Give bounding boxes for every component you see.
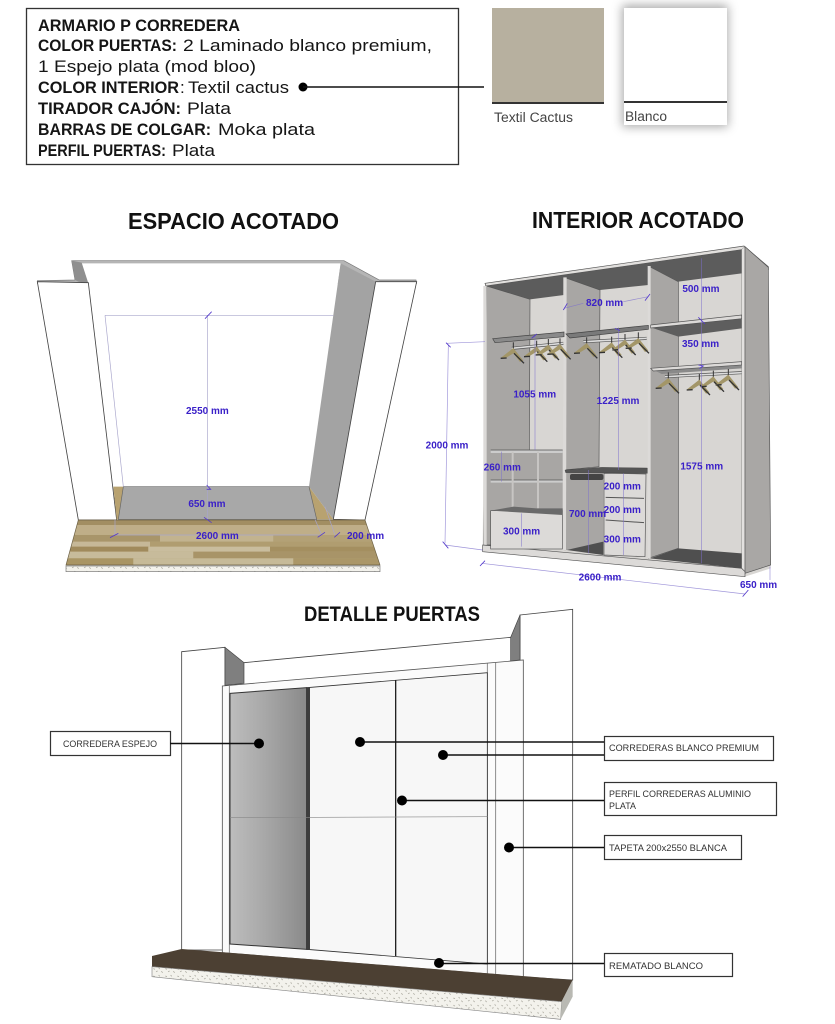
specification box xyxy=(26,8,458,164)
hanging rails: Moka plata xyxy=(218,120,316,139)
swatch: blanco xyxy=(622,5,728,127)
dimension: 650: 650 mm xyxy=(188,499,226,510)
door profile: PERFIL PUERTAS: xyxy=(38,141,166,160)
dimension: 2600: 2600 mm xyxy=(579,572,622,583)
interior colour xyxy=(38,78,289,97)
drawer handle: TIRADOR CAJÓN: xyxy=(38,99,181,118)
callout: rematado blanco: REMATADO BLANCO xyxy=(609,961,703,972)
diagram: espacio acotado xyxy=(37,261,417,572)
dimension: 2000: 2000 mm xyxy=(426,440,469,451)
dimension: 820: 820 mm xyxy=(586,298,623,309)
swatch: textil cactus: Textil Cactus xyxy=(494,110,573,125)
dimension: 1055: 1055 mm xyxy=(513,389,556,400)
callout: perfil correderas: PERFIL CORREDERAS ALUMINIO xyxy=(609,789,751,800)
shelves xyxy=(491,315,742,557)
left wall xyxy=(182,647,225,950)
dimension: 1225: 1225 mm xyxy=(597,396,640,407)
diagram: interior acotado xyxy=(426,246,777,597)
dimension: 300 left: 300 mm xyxy=(503,526,540,537)
door colour: COLOR PUERTAS: xyxy=(38,36,177,55)
diagram: detalle puertas xyxy=(152,609,573,1019)
dimension: 200 lower drawer: 200 mm xyxy=(604,505,641,516)
dimension: 500: 500 mm xyxy=(682,284,720,295)
callout: perfil correderas xyxy=(397,782,776,816)
callout: tapeta: TAPETA 200x2550 BLANCA xyxy=(609,843,728,854)
heading: detalle puertas: DETALLE PUERTAS xyxy=(304,603,480,626)
pointer to interior swatch xyxy=(298,82,484,92)
dimension lines xyxy=(445,258,770,594)
dimension: 650: 650 mm xyxy=(740,580,777,591)
product title: ARMARIO P CORREDERA xyxy=(38,16,240,35)
dimension: 1575: 1575 mm xyxy=(680,461,723,472)
callout: corredera espejo: CORREDERA ESPEJO xyxy=(63,739,157,750)
dimension: 200: 200 mm xyxy=(347,531,384,542)
dimension: 260: 260 mm xyxy=(484,462,521,473)
dimension: 700: 700 mm xyxy=(569,509,606,520)
hangers xyxy=(501,332,739,395)
swatch: textil cactus xyxy=(492,8,604,125)
hanging rails: BARRAS DE COLGAR: xyxy=(38,120,211,139)
door colour: 2 Laminado blanco premium, xyxy=(183,36,432,55)
heading: interior acotado: INTERIOR ACOTADO xyxy=(532,207,744,233)
callout: correderas blanco premium xyxy=(355,736,774,760)
dimension: 350: 350 mm xyxy=(682,339,719,350)
dimension: 300 drawer: 300 mm xyxy=(604,534,641,545)
drawer handle: Plata xyxy=(187,99,232,118)
door profile: Plata xyxy=(172,141,216,160)
callout: corredera espejo xyxy=(50,732,264,756)
dimension: 2600: 2600 mm xyxy=(196,531,239,542)
dimension: 200 upper drawer: 200 mm xyxy=(604,482,641,493)
floor xyxy=(152,949,573,1002)
callout: correderas blanco premium: CORREDERAS BLANCO PREMIUM xyxy=(609,743,759,754)
dimension: 2550: 2550 mm xyxy=(186,406,229,417)
hanging rails xyxy=(38,120,316,139)
interior colour: COLOR INTERIOR xyxy=(38,78,179,97)
callout: tapeta xyxy=(504,836,742,860)
callout: perfil correderas: PLATA xyxy=(609,801,637,812)
interior colour: : xyxy=(180,78,185,97)
swatch: blanco: Blanco xyxy=(625,109,667,124)
door colour second line: 1 Espejo plata (mod bloo) xyxy=(38,57,256,76)
door colour xyxy=(38,36,432,55)
interior colour: Textil cactus xyxy=(188,78,289,97)
door frame xyxy=(222,660,523,977)
right wall xyxy=(520,609,573,980)
callout: rematado blanco xyxy=(434,954,732,976)
heading: espacio acotado: ESPACIO ACOTADO xyxy=(128,208,339,234)
